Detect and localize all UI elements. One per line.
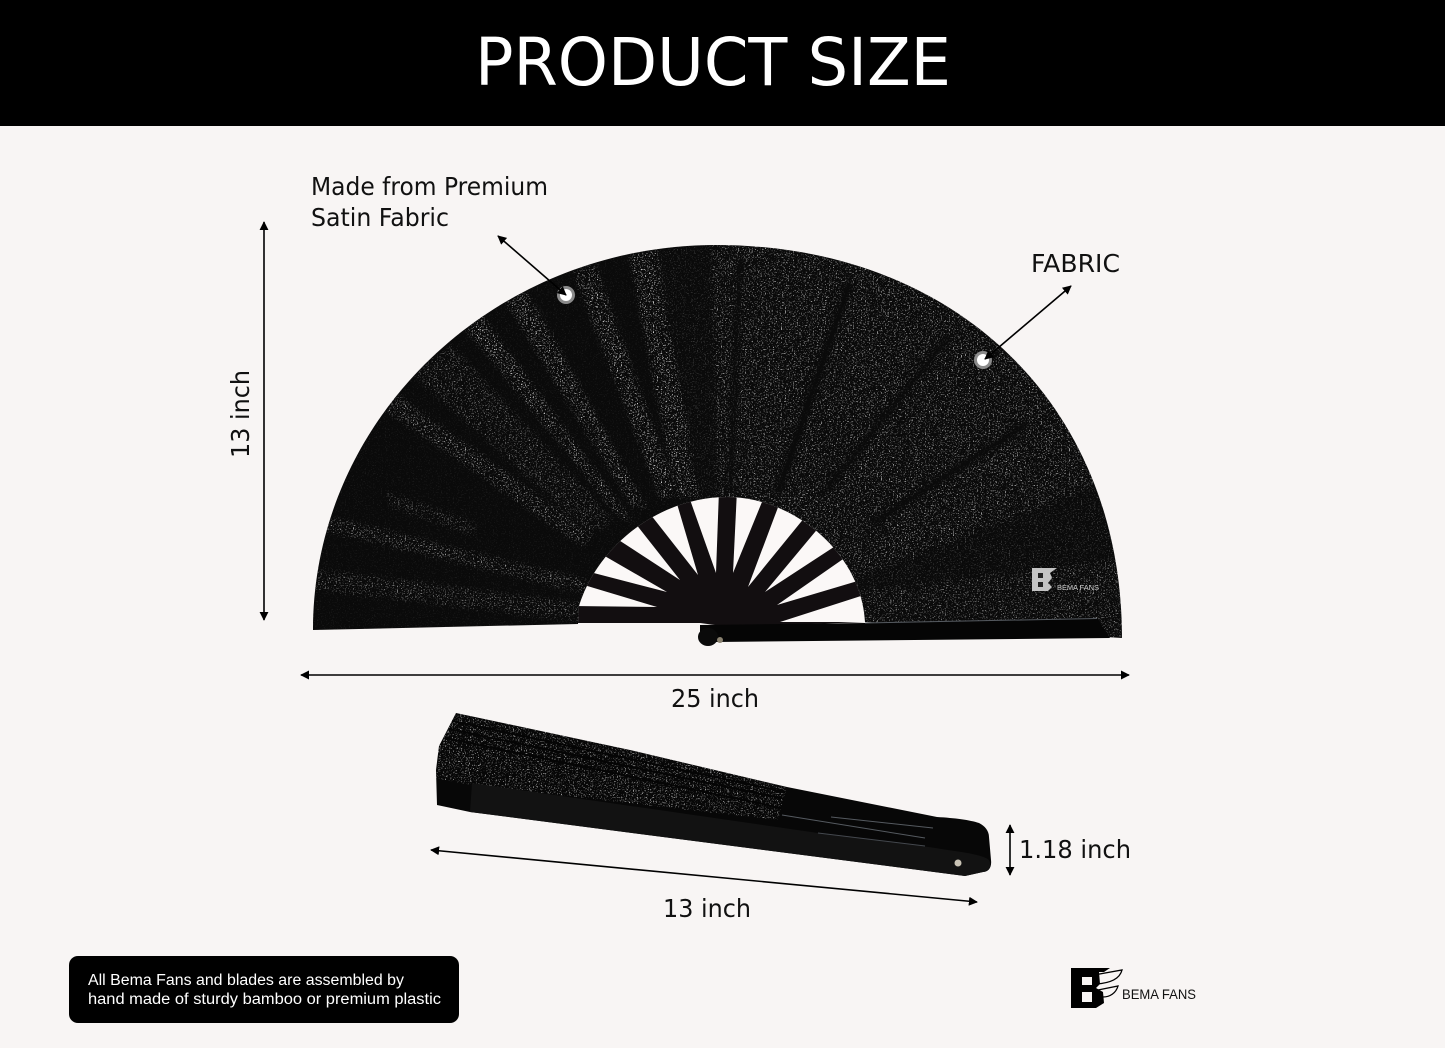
open fan illustration bbox=[300, 235, 1130, 646]
dimension: closed thickness 1.18 inch: 1.18 inch bbox=[1019, 835, 1131, 864]
dimension: closed length 13 inch bbox=[431, 850, 977, 923]
title banner: PRODUCT SIZE bbox=[475, 24, 951, 101]
printed logo on fabric bbox=[1032, 568, 1099, 592]
closed fan illustration bbox=[430, 710, 991, 876]
brand logo bbox=[1071, 968, 1196, 1008]
callout: premium satin fabric: Made from Premium bbox=[311, 172, 548, 201]
dimension: fan height 13 inch: 13 inch bbox=[226, 370, 255, 458]
closed fan blades bbox=[436, 713, 991, 876]
note box: hand made of sturdy bamboo or premium plastic bbox=[88, 991, 441, 1008]
closed fan glitter bbox=[436, 714, 787, 820]
callout: fabric bbox=[985, 249, 1120, 359]
dimension: fan width 25 inch: 25 inch bbox=[671, 684, 759, 713]
callout: premium satin fabric: Satin Fabric bbox=[311, 203, 449, 232]
brand logo: BEMA FANS bbox=[1122, 986, 1196, 1002]
closed fan rivet bbox=[954, 860, 962, 866]
title banner bbox=[0, 0, 1445, 126]
fan fabric bbox=[313, 245, 1122, 638]
fabric glitter texture bbox=[300, 235, 1130, 645]
guard stick and pivot bbox=[700, 618, 1110, 642]
closed fan guard stick bbox=[470, 783, 990, 876]
note box: All Bema Fans and blades are assembled by bbox=[88, 972, 404, 989]
icon: winged B bbox=[1071, 968, 1122, 1008]
callout: premium satin fabric bbox=[311, 172, 566, 295]
note box bbox=[69, 956, 459, 1023]
dimension: closed length 13 inch: 13 inch bbox=[663, 894, 751, 923]
bamboo ribs bbox=[572, 490, 872, 627]
printed logo on fabric: BEMA FANS bbox=[1057, 583, 1099, 592]
callout: fabric: FABRIC bbox=[1031, 249, 1120, 278]
dimension: closed thickness 1.18 inch bbox=[1010, 825, 1131, 875]
fabric grommets bbox=[557, 286, 575, 304]
